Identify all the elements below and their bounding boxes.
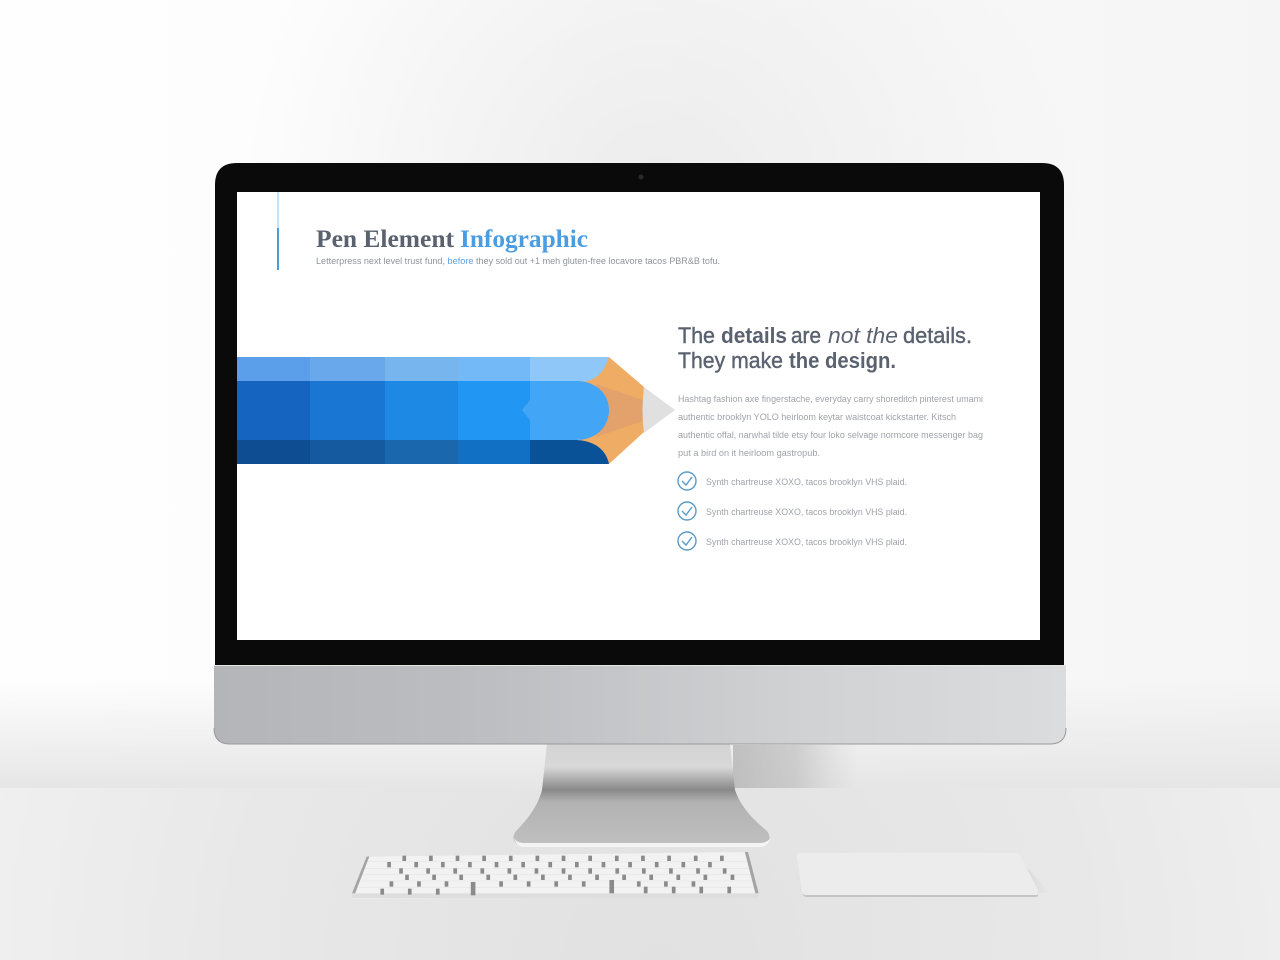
headline: not the <box>828 323 898 348</box>
pencil illustration <box>237 357 675 464</box>
icon: check circle <box>678 502 696 520</box>
body paragraph: authentic brooklyn YOLO heirloom keytar waistcoat kickstarter. Kitsch <box>678 412 956 422</box>
pencil top band <box>237 357 609 382</box>
slide screen <box>237 192 1040 640</box>
title <box>316 226 588 253</box>
headline: details. <box>903 323 972 348</box>
pencil wood tip <box>580 357 644 464</box>
trackpad <box>797 853 1050 897</box>
headline <box>678 323 972 373</box>
body paragraph: Hashtag fashion axe fingerstache, everyday carry shoreditch pinterest umami <box>678 394 983 404</box>
subtitle: they sold out +1 meh gluten-free locavore tacos PBR&B tofu. <box>476 256 720 266</box>
body paragraph: put a bird on it heirloom gastropub. <box>678 448 820 458</box>
title: Pen Element <box>316 226 455 253</box>
monitor stand <box>514 744 771 847</box>
pencil bottom band <box>237 440 609 464</box>
title accent line <box>277 192 279 270</box>
body paragraph: authentic offal, narwhal tilde etsy four loko selvage normcore messenger bag <box>678 430 983 440</box>
headline: the design. <box>789 348 896 373</box>
subtitle: Letterpress next level trust fund, <box>316 256 445 266</box>
body paragraph <box>678 394 983 458</box>
icon: check circle <box>678 532 696 550</box>
icon: check circle <box>678 472 696 490</box>
monitor bezel <box>215 163 1064 665</box>
pencil graphite point <box>642 387 675 433</box>
subtitle <box>316 256 720 266</box>
checklist item 1 <box>678 472 907 490</box>
checklist item 3 <box>678 532 907 550</box>
checklist item 2: Synth chartreuse XOXO, tacos brooklyn VHS plaid. <box>706 507 907 517</box>
title: Infographic <box>460 226 588 253</box>
monitor chin <box>214 665 1066 744</box>
headline: They make <box>678 348 783 373</box>
checklist item 3: Synth chartreuse XOXO, tacos brooklyn VHS plaid. <box>706 537 907 547</box>
checklist item 1: Synth chartreuse XOXO, tacos brooklyn VHS plaid. <box>706 477 907 487</box>
headline: The <box>678 323 715 348</box>
subtitle: before <box>448 256 474 266</box>
pencil middle band <box>237 381 609 440</box>
headline: are <box>791 323 821 348</box>
headline: details <box>721 323 787 348</box>
keyboard <box>352 852 759 898</box>
checklist item 2 <box>678 502 907 520</box>
